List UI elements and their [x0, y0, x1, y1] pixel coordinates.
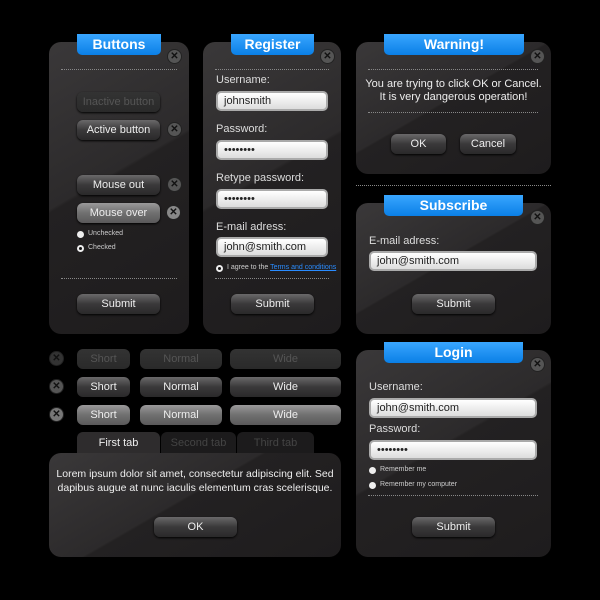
panel: buttons	[49, 42, 189, 334]
icon: close	[168, 178, 181, 191]
icon: close: ✕	[323, 51, 332, 62]
password field: ••••••••	[224, 144, 255, 156]
row normal	[49, 377, 341, 397]
remember me	[369, 466, 426, 474]
active button: Active button	[87, 124, 150, 136]
email field: E-mail adress:	[216, 221, 286, 233]
radio unchecked	[77, 230, 123, 238]
panel: tab content	[49, 453, 341, 557]
submit button	[412, 294, 495, 314]
panel: warning	[356, 42, 551, 174]
warning text	[365, 78, 542, 103]
submit button	[412, 517, 495, 537]
retype password field: ••••••••	[224, 193, 255, 205]
mouse out button	[77, 175, 160, 195]
password field: Password:	[369, 423, 420, 435]
second tab	[161, 432, 236, 454]
row normal: Wide	[273, 381, 298, 393]
radio unchecked: Unchecked	[88, 230, 123, 237]
warning text: It is very dangerous operation!	[380, 91, 527, 103]
first tab: First tab	[99, 437, 138, 449]
row normal: ✕	[52, 381, 61, 392]
OK button	[391, 134, 446, 154]
username field	[216, 74, 328, 111]
icon: close	[321, 50, 334, 63]
active button	[77, 120, 160, 140]
password field: ••••••••	[377, 444, 408, 456]
username field	[369, 381, 537, 418]
lorem text	[56, 468, 334, 494]
email field: E-mail adress:	[369, 235, 439, 247]
submit button	[77, 294, 160, 314]
email field	[369, 235, 537, 271]
remember me: Remember me	[380, 466, 426, 473]
submit button	[231, 294, 314, 314]
password field	[369, 423, 537, 460]
icon: close: ✕	[169, 207, 178, 218]
submit button: Submit	[255, 298, 290, 310]
password field	[216, 123, 328, 160]
icon: close: ✕	[170, 51, 179, 62]
row hover: Normal	[163, 409, 199, 421]
username field: Username:	[216, 74, 270, 86]
tabs	[77, 432, 314, 453]
row normal: Short	[90, 381, 117, 393]
tab title: Warning: Warning!	[424, 36, 484, 52]
submit button: Submit	[436, 298, 471, 310]
icon: close	[531, 211, 544, 224]
icon: close: ✕	[533, 212, 542, 223]
radio checked	[77, 244, 116, 252]
username field: john@smith.com	[377, 402, 459, 414]
username field: johnsmith	[224, 95, 271, 107]
inactive button	[77, 92, 160, 112]
row hover	[49, 405, 341, 425]
OK button	[154, 517, 237, 537]
tab title: Register: Register	[244, 36, 301, 52]
tab title: Login: Login	[434, 344, 473, 360]
second tab: Second tab	[171, 437, 226, 449]
retype password field: Retype password:	[216, 172, 304, 184]
OK button: OK	[411, 138, 426, 150]
tab title: Buttons: Buttons	[93, 36, 145, 52]
mouse out button: Mouse out	[93, 179, 144, 191]
warning text: You are trying to click OK or Cancel.	[365, 78, 542, 90]
inactive button: Inactive button	[83, 96, 154, 108]
retype password field	[216, 172, 328, 209]
row inactive: Normal	[163, 353, 199, 365]
agree checkbox: I agree to the Terms and conditions	[227, 264, 336, 271]
email field: john@smith.com	[224, 241, 306, 253]
tab title: Buttons	[77, 34, 161, 55]
panel: register	[203, 42, 341, 334]
third tab: Third tab	[254, 437, 297, 449]
lorem text: dapibus augue at nunc iaculis elementum cras scelerisque.	[58, 482, 332, 494]
icon: close: ✕	[533, 51, 542, 62]
submit button: Submit	[436, 521, 471, 533]
tab title: Subscribe: Subscribe	[420, 197, 487, 213]
row inactive: ✕	[52, 353, 61, 364]
icon: close: ✕	[170, 124, 179, 135]
row normal: Normal	[163, 381, 199, 393]
Cancel button: Cancel	[471, 138, 505, 150]
row inactive: Short	[90, 353, 117, 365]
icon: close	[168, 50, 181, 63]
remember my computer: Remember my computer	[380, 481, 457, 488]
row hover: ✕	[52, 409, 61, 420]
mouse over button	[77, 203, 160, 223]
OK button: OK	[188, 521, 203, 533]
icon: close: ✕	[170, 179, 179, 190]
radio checked: Checked	[88, 244, 116, 251]
username field: Username:	[369, 381, 423, 393]
button size rows	[49, 349, 341, 425]
icon: close	[168, 123, 181, 136]
row hover: Short	[90, 409, 117, 421]
email field	[216, 221, 328, 257]
row hover: Wide	[273, 409, 298, 421]
tab title: Subscribe	[384, 195, 523, 216]
icon: close	[167, 206, 180, 219]
row inactive	[49, 349, 341, 369]
lorem text: Lorem ipsum dolor sit amet, consectetur adipiscing elit. Sed	[56, 468, 334, 480]
email field: john@smith.com	[377, 255, 459, 267]
password field: Password:	[216, 123, 267, 135]
panel: login	[356, 350, 551, 557]
icon: close: ✕	[533, 359, 542, 370]
third tab	[237, 432, 314, 454]
submit button: Submit	[101, 298, 136, 310]
tab title: Register	[231, 34, 314, 55]
mouse over button: Mouse over	[90, 207, 147, 219]
first tab	[77, 432, 160, 456]
tab title: Warning	[384, 34, 524, 55]
icon: close	[531, 358, 544, 371]
row inactive: Wide	[273, 353, 298, 365]
tab title: Login	[384, 342, 523, 363]
panel: subscribe	[356, 203, 551, 334]
icon: close	[531, 50, 544, 63]
Cancel button	[460, 134, 516, 154]
